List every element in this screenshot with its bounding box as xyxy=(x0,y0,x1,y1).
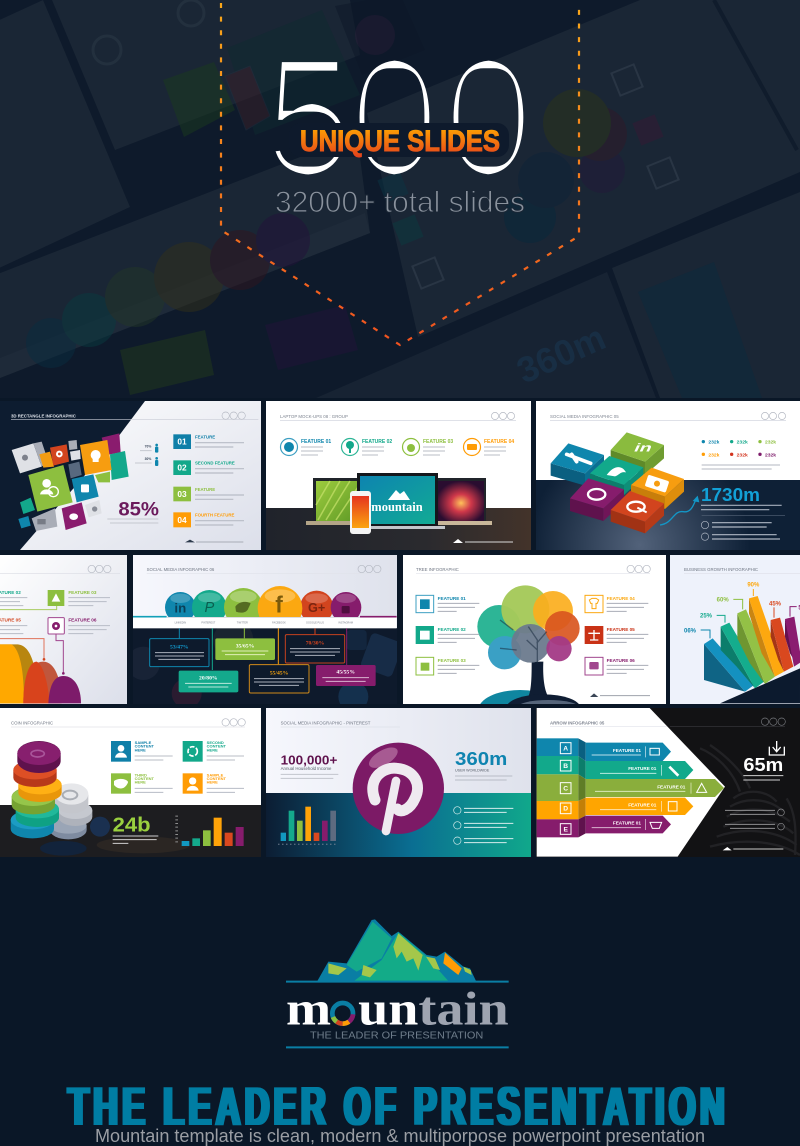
logo wordmark: mountain xyxy=(286,982,509,1035)
badge: unique slides: UNIQUE SLIDES xyxy=(300,125,500,158)
feature 04: FOURTH FEATURE xyxy=(195,513,234,518)
isometric social tiles xyxy=(551,432,684,533)
360m stat: 360m xyxy=(455,748,507,769)
slide: Pinterest infographic: USER WORLDWIDE xyxy=(455,768,490,772)
notes xyxy=(701,521,780,540)
stat grid 232k: 232k xyxy=(737,452,748,458)
arrow: feature orange: FEATURE 01 xyxy=(628,802,657,807)
feature 02 xyxy=(416,626,479,644)
isometric social tiles: in xyxy=(632,441,655,454)
arrow: feature blue xyxy=(586,743,671,761)
slide: social media infographic 06 xyxy=(127,555,404,712)
stat box 45/55 xyxy=(316,665,376,686)
headline: 500: 500 xyxy=(263,25,535,211)
gender stats: 70% xyxy=(145,445,151,449)
staircase bars xyxy=(704,596,800,692)
bar chart xyxy=(177,816,244,846)
stat grid 232k xyxy=(702,440,776,456)
3D arcs xyxy=(0,644,81,703)
social spheres: P xyxy=(204,600,214,616)
65m stat: 65m xyxy=(743,754,783,775)
letter tiles: C xyxy=(563,786,568,793)
tile icons xyxy=(567,454,591,463)
slide: features with 3D arcs xyxy=(0,555,127,704)
hero panel with ghosted slides xyxy=(0,0,800,398)
white arrow panel xyxy=(537,708,725,857)
logo mountains xyxy=(317,919,476,981)
stat grid 232k: 232k xyxy=(737,440,748,446)
slide: tree infographic xyxy=(403,555,666,730)
slide title: COIN INFOGRAPHIC xyxy=(11,720,53,725)
device mock-ups xyxy=(306,473,492,534)
feature 03 xyxy=(173,487,244,501)
label band: TWITTER xyxy=(237,622,248,625)
stat box 20/80: 20/80% xyxy=(199,675,218,681)
arrow: feature orange xyxy=(586,798,693,815)
stat box 70/30 xyxy=(285,635,345,663)
letter tiles: A xyxy=(563,746,568,753)
slide: social media infographic 05 xyxy=(536,401,800,550)
bar labels: 25% xyxy=(700,613,713,619)
label band: INSTAGRAM xyxy=(338,622,353,625)
colored ring on the o xyxy=(332,1003,353,1024)
1730m stat: 1730m xyxy=(701,484,760,505)
notes xyxy=(725,809,784,830)
feature 06 xyxy=(585,657,648,675)
feature badges: FEATURE 01 xyxy=(301,439,331,445)
stat box 53/47: 53/47% xyxy=(170,645,189,651)
slide title: 3D RECTANGLE INFOGRAPHIC xyxy=(11,413,76,418)
stat box 55/45: 55/45% xyxy=(270,671,289,677)
feature 06: FEATURE 06 xyxy=(68,618,97,623)
feature badges xyxy=(280,438,514,456)
feature 01 xyxy=(173,434,244,449)
sample content green: HERE xyxy=(135,780,146,785)
24b stat: 24b xyxy=(113,813,151,836)
feature 04: FEATURE 04 xyxy=(607,596,635,601)
sample content teal: CONTENT xyxy=(207,744,226,749)
feature 02: 02 xyxy=(177,463,187,473)
social spheres: G+ xyxy=(308,601,325,615)
100,000+ stat: 100,000+ xyxy=(281,753,337,767)
footer credit xyxy=(590,693,650,697)
download icon xyxy=(769,741,784,755)
feature 05: FEATURE 05 xyxy=(607,627,635,632)
slide: laptop mock-ups xyxy=(266,401,531,550)
stat grid 232k: 232k xyxy=(708,452,720,458)
bar labels: 90% xyxy=(747,583,760,589)
feature badges: FEATURE 04 xyxy=(484,439,514,445)
arrow: feature green xyxy=(586,779,724,797)
slide title: SOCIAL MEDIA INFOGRAPHIC 05 xyxy=(550,414,619,419)
stat box 70/30: 70/30% xyxy=(306,641,325,647)
slide title: TREE INFOGRAPHIC xyxy=(416,567,459,572)
feature 03: FEATURE xyxy=(195,487,215,492)
header buttons xyxy=(222,412,245,419)
dashed chevron outline xyxy=(221,3,579,345)
sample content blue xyxy=(111,740,173,762)
social spheres: f xyxy=(275,592,283,618)
connector lines xyxy=(179,628,347,670)
stat grid 232k: 232k xyxy=(765,452,776,458)
slide: business growth infographic xyxy=(670,555,800,704)
slide title: ARROW INFOGRAPHIC 05 xyxy=(550,720,605,725)
stat box 35/65: 35/65% xyxy=(236,643,255,649)
slide: coin infographic xyxy=(0,708,261,857)
sample content green xyxy=(111,772,173,794)
feature 04 xyxy=(173,512,244,527)
label connectors xyxy=(701,589,797,638)
slide title: SOCIAL MEDIA INFOGRAPHIC 06 xyxy=(147,567,215,572)
label band: FACEBOOK xyxy=(272,622,286,625)
sample content teal xyxy=(183,740,244,762)
feature 03: 03 xyxy=(177,489,187,499)
arrow: feature blue: FEATURE 01 xyxy=(613,748,641,753)
arrow: feature teal: FEATURE 01 xyxy=(628,766,657,771)
mountain logo xyxy=(286,919,509,1047)
stat box 45/55: 45/55% xyxy=(336,670,355,676)
feature 03: FEATURE 03 xyxy=(68,590,97,595)
sample content teal: HERE xyxy=(207,747,218,752)
letter tiles: D xyxy=(563,806,568,813)
hero panel with ghosted slides: 360m xyxy=(511,316,611,391)
logo tagline: THE LEADER OF PRESENTATION xyxy=(310,1031,483,1042)
letter tiles: E xyxy=(563,826,568,833)
feature badges: FEATURE 03 xyxy=(423,439,453,445)
slide title: LAPTOP MOCK-UPS 08 : GROUP xyxy=(280,414,348,419)
label band: LINKEDIN xyxy=(175,622,186,625)
gender stats xyxy=(135,444,158,466)
stat box 53/47 xyxy=(150,639,209,667)
slide: Pinterest infographic: Annual Household Income xyxy=(281,766,332,771)
85 percent stat: 85% xyxy=(118,499,159,520)
feature badges: FEATURE 02 xyxy=(362,439,392,445)
label band: PINTEREST xyxy=(201,622,216,625)
sample content orange xyxy=(183,772,244,794)
arrow: feature green: FEATURE 01 xyxy=(657,784,686,789)
sample content blue: CONTENT xyxy=(135,744,154,749)
notes xyxy=(454,807,513,844)
sample content blue: SAMPLE xyxy=(135,740,152,745)
feature 04 xyxy=(585,595,648,613)
slide title: SOCIAL MEDIA INFOGRAPHIC - PINTEREST xyxy=(281,720,371,725)
photo backdrop detail xyxy=(40,817,190,856)
slide: 3D rectangle infographic xyxy=(0,401,261,550)
device mock-ups: mountain xyxy=(371,500,423,514)
bar chart xyxy=(278,807,337,844)
tree illustration xyxy=(477,585,581,730)
feature 01: 01 xyxy=(177,437,187,447)
letter tiles: B xyxy=(563,763,568,770)
bar labels xyxy=(684,583,800,634)
feature 03 xyxy=(416,657,479,675)
letter tiles xyxy=(560,743,571,834)
tagline: Mountain template is clean, modern & multiporpose powerpoint presentation xyxy=(95,1126,705,1146)
arrow: feature plum: FEATURE 01 xyxy=(613,820,641,825)
letter ribbons xyxy=(537,738,586,837)
social spheres xyxy=(165,586,362,617)
bar labels: 45% xyxy=(769,601,782,607)
arrow: feature teal xyxy=(586,761,693,779)
sample content green: CONTENT xyxy=(135,776,154,781)
arrow: feature plum xyxy=(586,816,671,833)
sample content green: THIRD xyxy=(135,772,147,777)
slide: arrow infographic xyxy=(536,708,800,857)
zebra backdrop xyxy=(700,745,800,855)
label band xyxy=(133,617,397,628)
Pinterest sphere xyxy=(353,743,444,834)
3D cube cluster xyxy=(12,433,129,531)
feature 01 xyxy=(416,595,479,613)
sample content orange: CONTENT xyxy=(207,776,226,781)
gender stats: 30% xyxy=(145,457,151,461)
stat grid 232k: 232k xyxy=(708,440,720,446)
label band: GOOGLE PLUS xyxy=(306,622,324,625)
feature 02: FEATURE 02 xyxy=(438,627,466,632)
subheading: total slides: 32000+ total slides xyxy=(275,186,525,219)
growth arrow xyxy=(660,501,696,526)
social spheres: in xyxy=(174,601,186,616)
sample content orange: SAMPLE xyxy=(207,772,224,777)
feature 01: FEATURE xyxy=(195,435,215,440)
sample content teal: SECOND xyxy=(207,740,224,745)
slide title: BUSINESS GROWTH INFOGRAPHIC xyxy=(684,567,758,572)
feature 02: SECOND FEATURE xyxy=(195,461,235,466)
feature 06: FEATURE 06 xyxy=(607,658,635,663)
feature 02 xyxy=(173,460,244,475)
feature 01: FEATURE 01 xyxy=(438,596,466,601)
bar labels: 60% xyxy=(717,598,729,604)
dark corner xyxy=(720,668,800,703)
bar labels: 06% xyxy=(684,628,697,634)
stat box 20/80 xyxy=(179,671,238,692)
slide: Pinterest infographic xyxy=(266,708,531,857)
sample content blue: HERE xyxy=(135,747,146,752)
feature 03: FEATURE 03 xyxy=(438,658,466,663)
ghost icon backdrop xyxy=(133,628,397,704)
stat box 35/65 xyxy=(215,638,275,660)
coin stacks xyxy=(11,741,92,839)
stat grid 232k: 232k xyxy=(765,440,776,446)
footer credit xyxy=(723,847,783,850)
feature 04: 04 xyxy=(177,515,187,525)
feature 05 xyxy=(585,626,648,644)
sample content orange: HERE xyxy=(207,780,218,785)
stat box 55/45 xyxy=(249,665,309,693)
footer credit xyxy=(453,539,513,543)
